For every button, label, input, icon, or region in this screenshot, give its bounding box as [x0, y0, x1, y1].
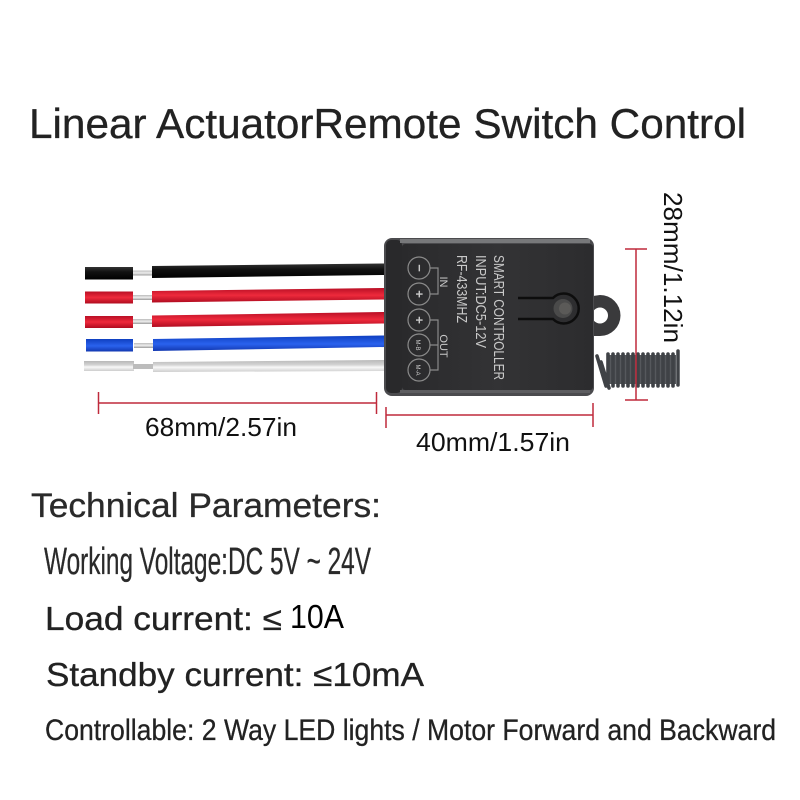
wire: white — [84, 360, 385, 372]
label: box width: 40mm/1.57in — [416, 427, 570, 457]
terminal symbols — [408, 257, 438, 381]
spec: working voltage: Working Voltage:DC 5V ~ 24V — [44, 541, 371, 583]
spec: load current: 10A — [290, 598, 344, 635]
dimension: wire length — [98, 392, 376, 414]
spec: standby current: Standby current: ≤10mA — [46, 656, 424, 693]
label: wire length: 68mm/2.57in — [145, 412, 297, 442]
title: Linear ActuatorRemote Switch Control — [29, 100, 746, 147]
dimension: box width — [386, 403, 593, 428]
heading: technical parameters: Technical Parameters: — [31, 487, 381, 525]
wire: black — [85, 264, 385, 280]
label: box height: 28mm/1.12in — [658, 192, 688, 343]
button — [518, 294, 579, 324]
device label: INPUT:DC5-12V — [472, 255, 489, 348]
device label: RF-433MHZ — [453, 255, 470, 323]
dimension: box height — [625, 249, 648, 400]
terminal labels: + — [412, 316, 427, 324]
terminal labels: OUT — [437, 334, 449, 358]
controller box — [384, 238, 594, 396]
terminal labels: IN — [437, 276, 449, 288]
antenna coil — [597, 351, 678, 388]
wire: blue — [86, 336, 385, 352]
wire: red 1 — [85, 288, 385, 304]
mounting tab — [592, 295, 620, 336]
terminal labels: M-B — [414, 340, 420, 350]
spec: load current: Load current: ≤ — [45, 600, 282, 637]
terminal labels: + — [412, 290, 427, 298]
terminal labels: M-A — [414, 364, 420, 376]
wires — [84, 264, 385, 372]
terminal labels — [412, 264, 449, 376]
device label — [453, 255, 507, 380]
wire: red 2 — [85, 312, 385, 328]
device label: SMART CONTROLLER — [490, 255, 507, 380]
terminal labels: − — [412, 264, 427, 272]
